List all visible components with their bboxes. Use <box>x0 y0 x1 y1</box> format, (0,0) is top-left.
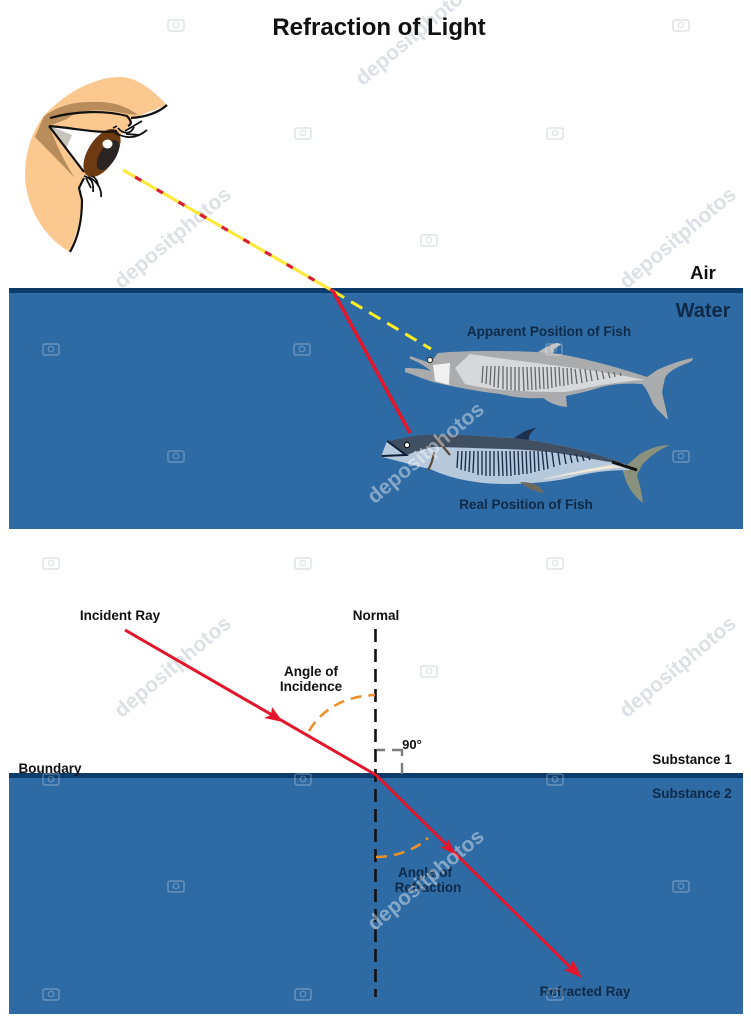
tail marks <box>612 462 637 470</box>
label: real position of fish: Real Position of Fish <box>459 497 593 512</box>
stripes <box>457 451 590 476</box>
panel: substance 2 <box>9 773 743 1014</box>
ray from eye to surface: yellow and red dashed <box>123 170 333 291</box>
mouth <box>382 441 406 456</box>
back <box>387 435 625 464</box>
eye socket shadow <box>35 116 75 178</box>
watermark on white <box>43 0 741 722</box>
arrowhead end <box>564 960 582 978</box>
dorsal fin <box>514 428 536 440</box>
title: Refraction of Light <box>272 14 486 41</box>
incident ray <box>125 630 376 775</box>
label: substance 2: Substance 2 <box>652 786 732 801</box>
icon: apparent fish (grey) <box>405 343 693 420</box>
label: angle of refraction: Refraction <box>395 880 461 895</box>
refracted ray <box>376 775 582 978</box>
body <box>405 351 693 420</box>
arrowhead <box>264 707 283 722</box>
label: substance 1: Substance 1 <box>652 752 732 767</box>
label: normal: Normal <box>353 608 399 623</box>
arrowhead <box>440 839 456 855</box>
label: refracted ray: Refracted Ray <box>540 984 631 999</box>
panel: water tank <box>9 288 743 529</box>
label: incident ray: Incident Ray <box>80 608 161 623</box>
tail <box>622 445 670 503</box>
apparent ray: dashed yellow extension <box>333 291 431 349</box>
eye white <box>49 126 122 172</box>
label: angle of refraction: Angle of <box>398 865 452 880</box>
lashes <box>84 121 147 197</box>
corner of the eye <box>50 126 72 149</box>
icon: eye <box>25 77 167 252</box>
cream belly line <box>540 465 625 480</box>
ventral fin <box>520 482 544 493</box>
belly and flank <box>455 354 645 392</box>
label: boundary: Boundary <box>18 761 82 776</box>
label: water: Water <box>676 300 731 322</box>
label: 90 degrees: 90° <box>402 737 422 752</box>
gill patch <box>433 363 450 385</box>
label: angle of incidence: Incidence <box>280 679 343 694</box>
body belly <box>382 435 630 484</box>
label: apparent position of fish: Apparent Position of Fish <box>467 324 631 339</box>
watermark on water: depositphotos <box>363 825 489 935</box>
watermark on water: depositphotos <box>363 398 489 508</box>
eye <box>427 357 433 363</box>
watermark on white: depositphotos <box>615 612 741 722</box>
normal line <box>374 629 377 997</box>
lid and profile lines <box>50 105 167 252</box>
skin <box>25 77 167 252</box>
watermark on white: depositphotos <box>615 183 741 293</box>
dorsal fin <box>538 343 561 354</box>
label: angle of incidence: Angle of <box>284 664 338 679</box>
eyelid band shadow <box>44 102 138 119</box>
real ray: red line in water <box>333 291 410 433</box>
watermark on water <box>43 344 689 1000</box>
right angle marker <box>377 750 402 774</box>
iris <box>76 123 128 183</box>
angle arc: incidence <box>309 695 375 731</box>
icon: real fish (dark blue) <box>382 428 670 503</box>
eye <box>404 442 410 448</box>
watermark on white: depositphotos <box>110 183 236 293</box>
angle arc: refraction <box>376 838 428 857</box>
gill and pectoral <box>428 437 450 470</box>
label: air: Air <box>690 262 716 283</box>
eye outline <box>49 126 117 172</box>
stripes <box>482 366 621 391</box>
watermark on white: depositphotos <box>110 612 236 722</box>
